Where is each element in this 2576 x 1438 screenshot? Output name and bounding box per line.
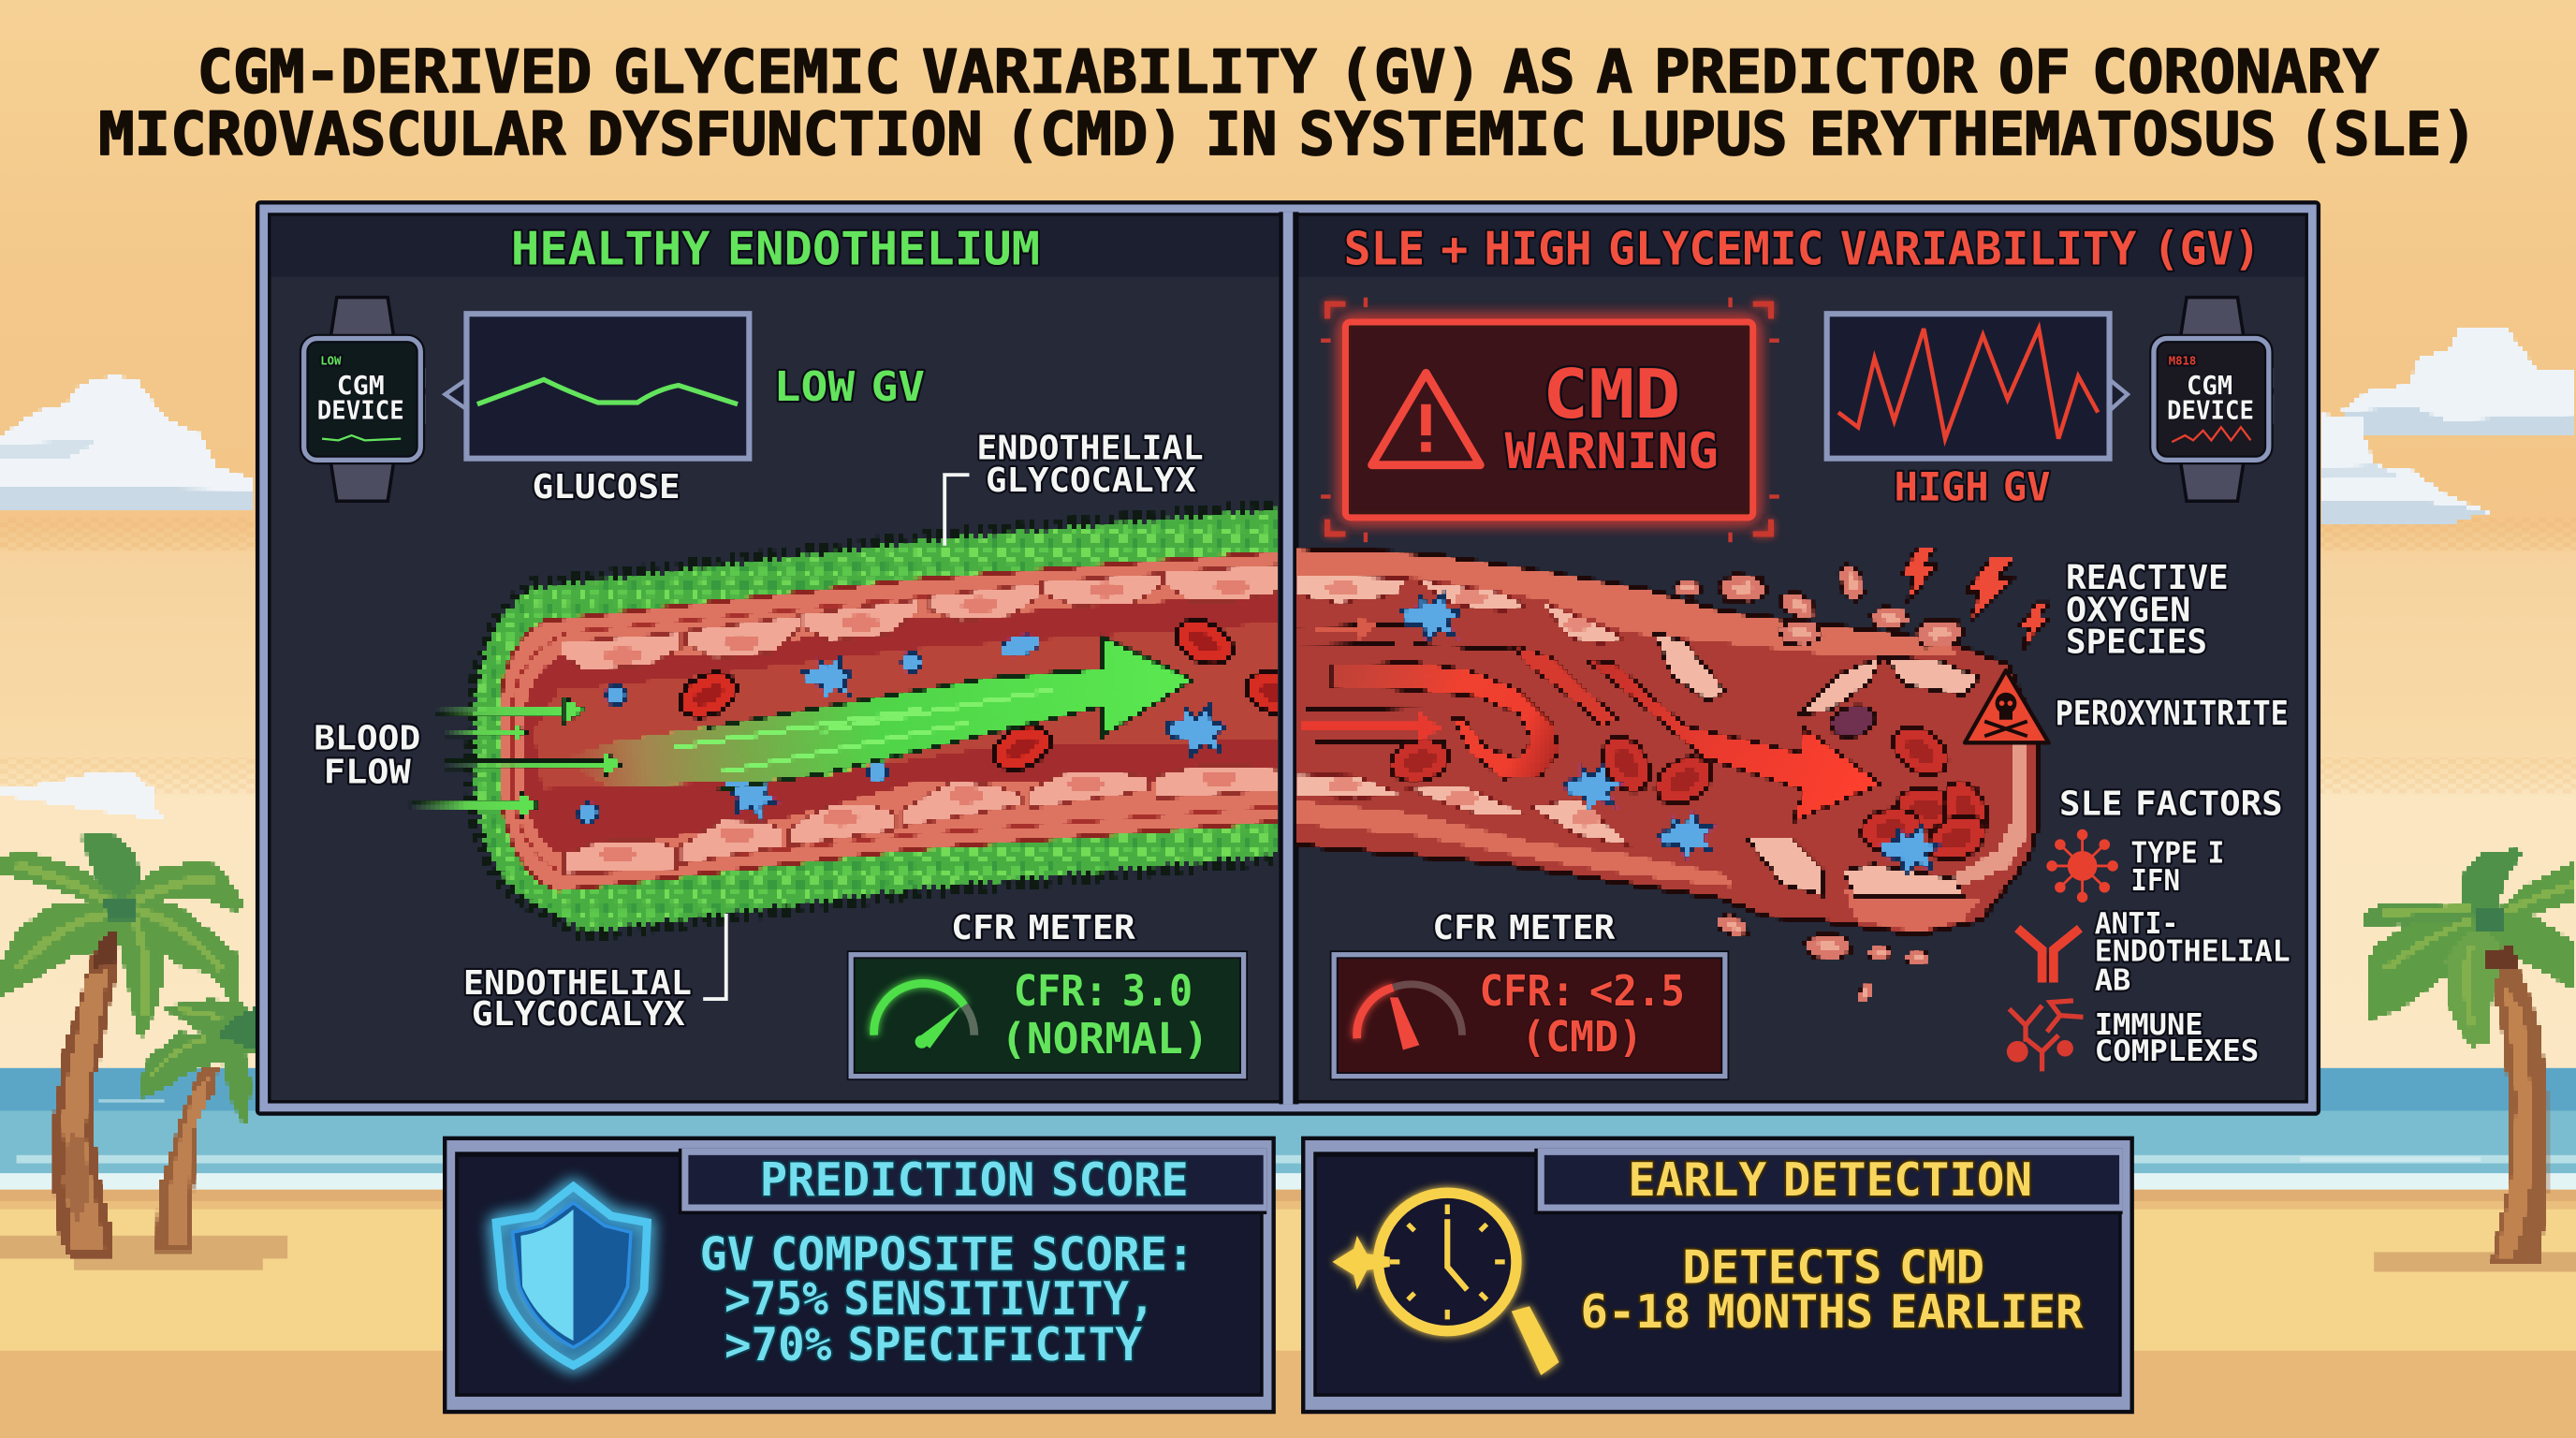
label: immune complexes [2095,1008,2259,1068]
label: reactive oxygen species [2066,559,2229,662]
label: endothelial glycocalyx top: ENDOTHELIAL [976,430,1204,468]
platelets [578,631,1227,827]
icon: type I IFN virus [2047,830,2117,902]
heading: SLE with high GV: SLE + HIGH GLYCEMIC VARIABILITY (GV) [1344,222,2261,276]
label: reactive oxygen species: OXYGEN [2066,591,2190,629]
title [98,37,2478,169]
label: blood flow [314,719,420,791]
callout: CMD warning: WARNING [1505,423,1719,480]
detection text: DETECTS CMD [1682,1240,1984,1295]
icon: right CGM watch [2154,298,2274,501]
label: immune complexes: IMMUNE [2095,1008,2203,1042]
damaged vessel illustration [1273,547,2049,1006]
label: low GV: LOW GV [774,363,925,411]
icon: left CGM watch: LOW [320,355,342,368]
meter: normal CFR: (NORMAL) [1001,1014,1209,1064]
icon: left CGM watch: DEVICE [317,397,404,426]
cloud: small left [0,772,169,822]
title: CGM-DERIVED GLYCEMIC VARIABILITY (GV) AS A PREDICTOR OF CORONARY [198,37,2378,106]
label: endothelial glycocalyx bottom: GLYCOCALYX [472,995,685,1034]
turbulent flow swirl [1331,646,1618,779]
label: CFR meter right: CFR METER [1432,909,1616,947]
label: anti-endothelial AB [2095,907,2291,997]
label: type I IFN: TYPE I [2130,836,2224,870]
icon: right CGM watch: DEVICE [2167,397,2254,426]
label: endothelial glycocalyx bottom: ENDOTHELIAL [463,964,692,1003]
heading: healthy endothelium: HEALTHY ENDOTHELIUM [511,222,1040,276]
cell nuclei [600,580,1251,862]
detection text: 6-18 MONTHS EARLIER [1580,1284,2084,1339]
label: CFR meter left: CFR METER [951,909,1135,947]
score text: GV COMPOSITE SCORE: [700,1227,1194,1282]
label: endothelial glycocalyx top: GLYCOCALYX [986,462,1196,500]
palm tree: right [2369,853,2576,1265]
lumen [524,592,1298,855]
label: type I IFN [2130,836,2224,898]
red blood cells [679,618,1278,772]
cell nuclei: damaged [1325,580,1600,827]
title: MICROVASCULAR DYSFUNCTION (CMD) IN SYSTEMIC LUPUS ERYTHEMATOSUS (SLE) [98,99,2478,169]
red blood cells: damaged [1385,701,1995,869]
heading: SLE factors: SLE FACTORS [2059,785,2283,824]
healthy flow arrow [559,636,1193,792]
panel tab: early detection header [1534,1149,2123,1214]
chaotic flow arrow [1587,661,1881,822]
label: immune complexes: COMPLEXES [2095,1034,2259,1068]
label: endothelial glycocalyx bottom [463,914,726,1034]
meter: reduced CFR: (CMD) [1521,1012,1643,1062]
label: high GV: HIGH GV [1895,463,2050,509]
detection text [1580,1240,2084,1339]
icon: shield [496,1186,648,1365]
palm tree: left small [143,1003,258,1252]
label: blood flow: FLOW [324,753,411,791]
label: anti-endothelial AB: ENDOTHELIAL [2095,935,2291,969]
icon: immune complexes [2007,1001,2083,1071]
main comparison panel frame [256,200,2320,1116]
icon: peroxynitrite skull triangle [1965,670,2049,742]
panel tab: prediction score header: PREDICTION SCORE [760,1152,1189,1207]
label: reactive oxygen species: SPECIES [2066,624,2207,662]
panel tab: early detection header: EARLY DETECTION [1628,1152,2032,1207]
panel tab: prediction score header [679,1149,1266,1214]
callout: CMD warning: CMD [1543,355,1680,433]
label: type I IFN: IFN [2130,864,2180,898]
labels, callouts, meters and score panels [304,222,2291,1414]
chart: low GV glucose trace [446,314,749,459]
panel: early detection [1301,1137,2134,1414]
icon: right CGM watch: M818 [2169,355,2196,368]
endothelial glycocalyx layer [470,503,1298,936]
panel: prediction score [443,1137,1276,1414]
label: endothelial glycocalyx top [944,430,1204,546]
label: anti-endothelial AB: ANTI- [2095,907,2178,941]
score text [700,1227,1194,1372]
label: glucose: GLUCOSE [533,468,681,506]
callout: CMD warning [1321,298,1779,542]
reactive oxygen bolts [1902,547,2049,649]
endothelial cells [562,564,1298,874]
activated platelets [1402,594,1939,874]
meter: reduced CFR: CFR: <2.5 [1479,966,1685,1016]
cloud: lower right [2323,414,2491,524]
damaged endothelial cells [1298,575,1632,846]
icon: antibody [2017,929,2080,983]
icon: clock magnifier [1332,1193,1559,1375]
icon: left CGM watch [304,298,426,501]
cloud: upper right [2341,327,2576,437]
meter: normal CFR: CFR: 3.0 [1014,966,1193,1016]
broken vessel body [1273,547,2039,935]
label: anti-endothelial AB: AB [2095,963,2130,997]
beach art: clouds and palm trees [0,327,2576,1265]
large cell fragments [1654,561,1980,1006]
label: peroxynitrite: PEROXYNITRITE [2056,695,2289,733]
chart: high GV glucose trace [1827,314,2128,459]
small red flow arrows [1303,618,1441,742]
icon: right CGM watch: CGM [2187,372,2232,401]
meter: normal CFR [851,955,1244,1077]
icon: left CGM watch: CGM [337,372,385,401]
label: blood flow: BLOOD [314,719,420,757]
palm tree: left large [0,836,237,1257]
healthy vessel illustration [411,503,1310,936]
label: reactive oxygen species: REACTIVE [2066,559,2229,597]
vessel wall bands [1273,549,2026,932]
inlet flow arrows [411,697,622,818]
cloud: upper left [0,374,255,509]
vessel wall [501,550,1298,890]
score text: >70% SPECIFICITY [724,1317,1142,1372]
score text: >75% SENSITIVITY, [724,1271,1155,1326]
meter: reduced CFR [1334,955,1725,1077]
